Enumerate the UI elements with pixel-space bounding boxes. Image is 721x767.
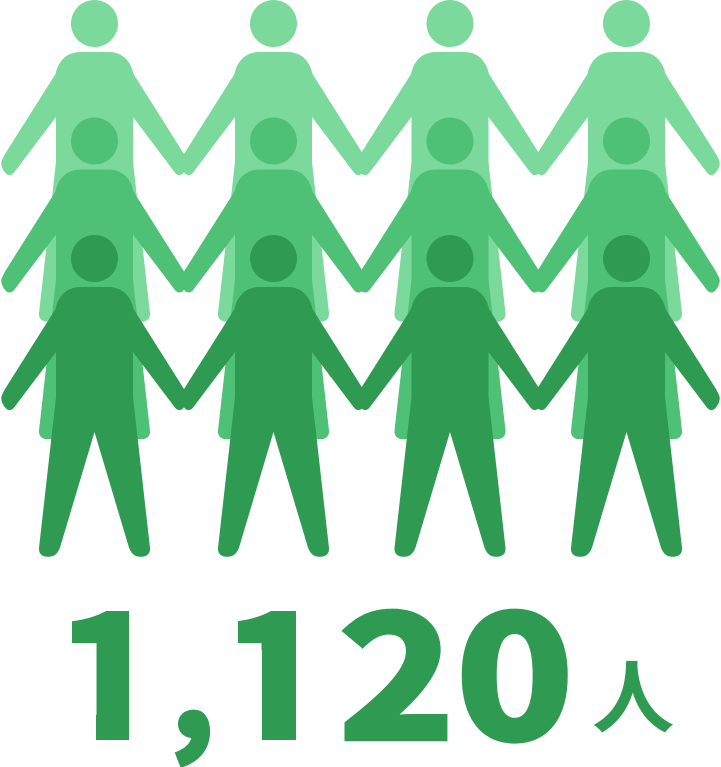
figure 1 [1, 118, 188, 439]
total count: 1,120人 [72, 608, 673, 767]
figure 2 [180, 235, 367, 557]
figure 2 [180, 0, 367, 322]
figure 1 [1, 0, 188, 322]
row 2: medium green figures [1, 118, 720, 439]
row 3: dark green figures [1, 235, 720, 557]
figure 3 [357, 0, 543, 322]
figure 4 [533, 118, 720, 439]
figure 3 [357, 235, 543, 557]
figure 4 [533, 0, 720, 322]
figure 1 [1, 235, 188, 557]
total count: 1,120人: 人 [592, 635, 674, 749]
figure 2 [180, 118, 367, 439]
row 1: light green figures [1, 0, 720, 322]
figure 4 [533, 235, 720, 557]
figure 3 [357, 118, 543, 439]
